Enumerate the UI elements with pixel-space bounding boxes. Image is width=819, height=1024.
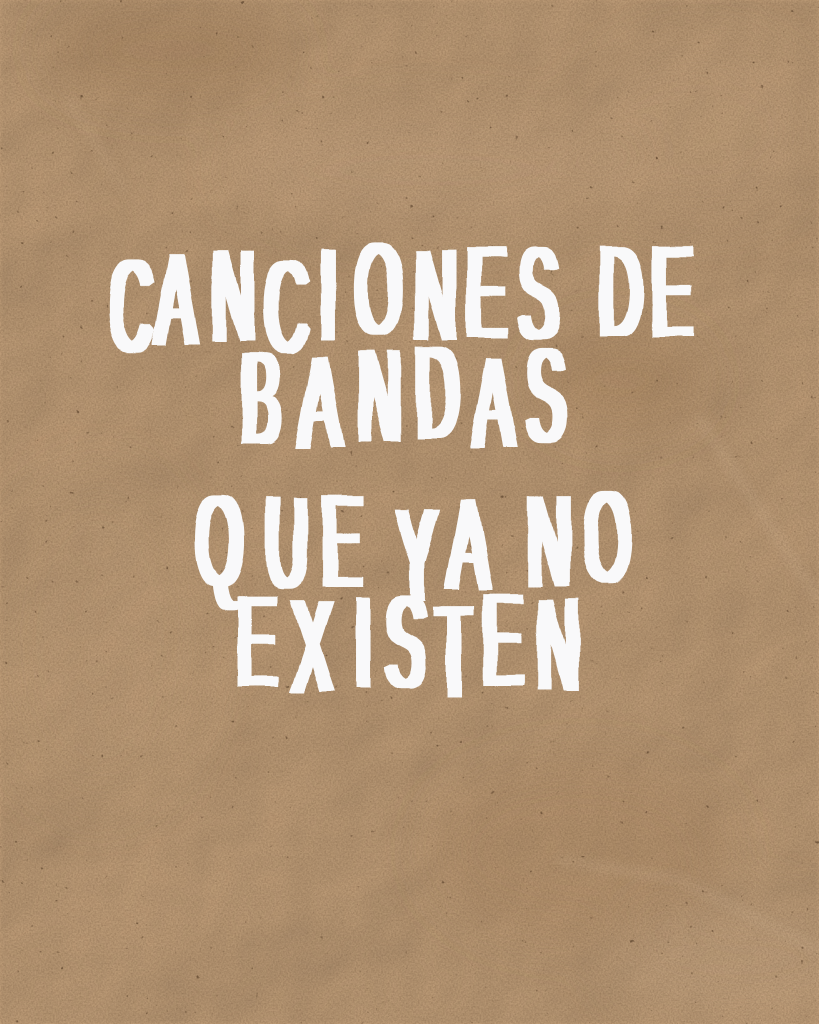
title line: BANDAS: BANDAS (241, 318, 566, 476)
title line: EXISTEN: EXISTEN (237, 565, 580, 725)
title line: QUE YA NO: QUE YA NO (196, 462, 630, 629)
title line: CANCIONES DE: CANCIONES DE (110, 215, 692, 380)
title (110, 215, 692, 725)
